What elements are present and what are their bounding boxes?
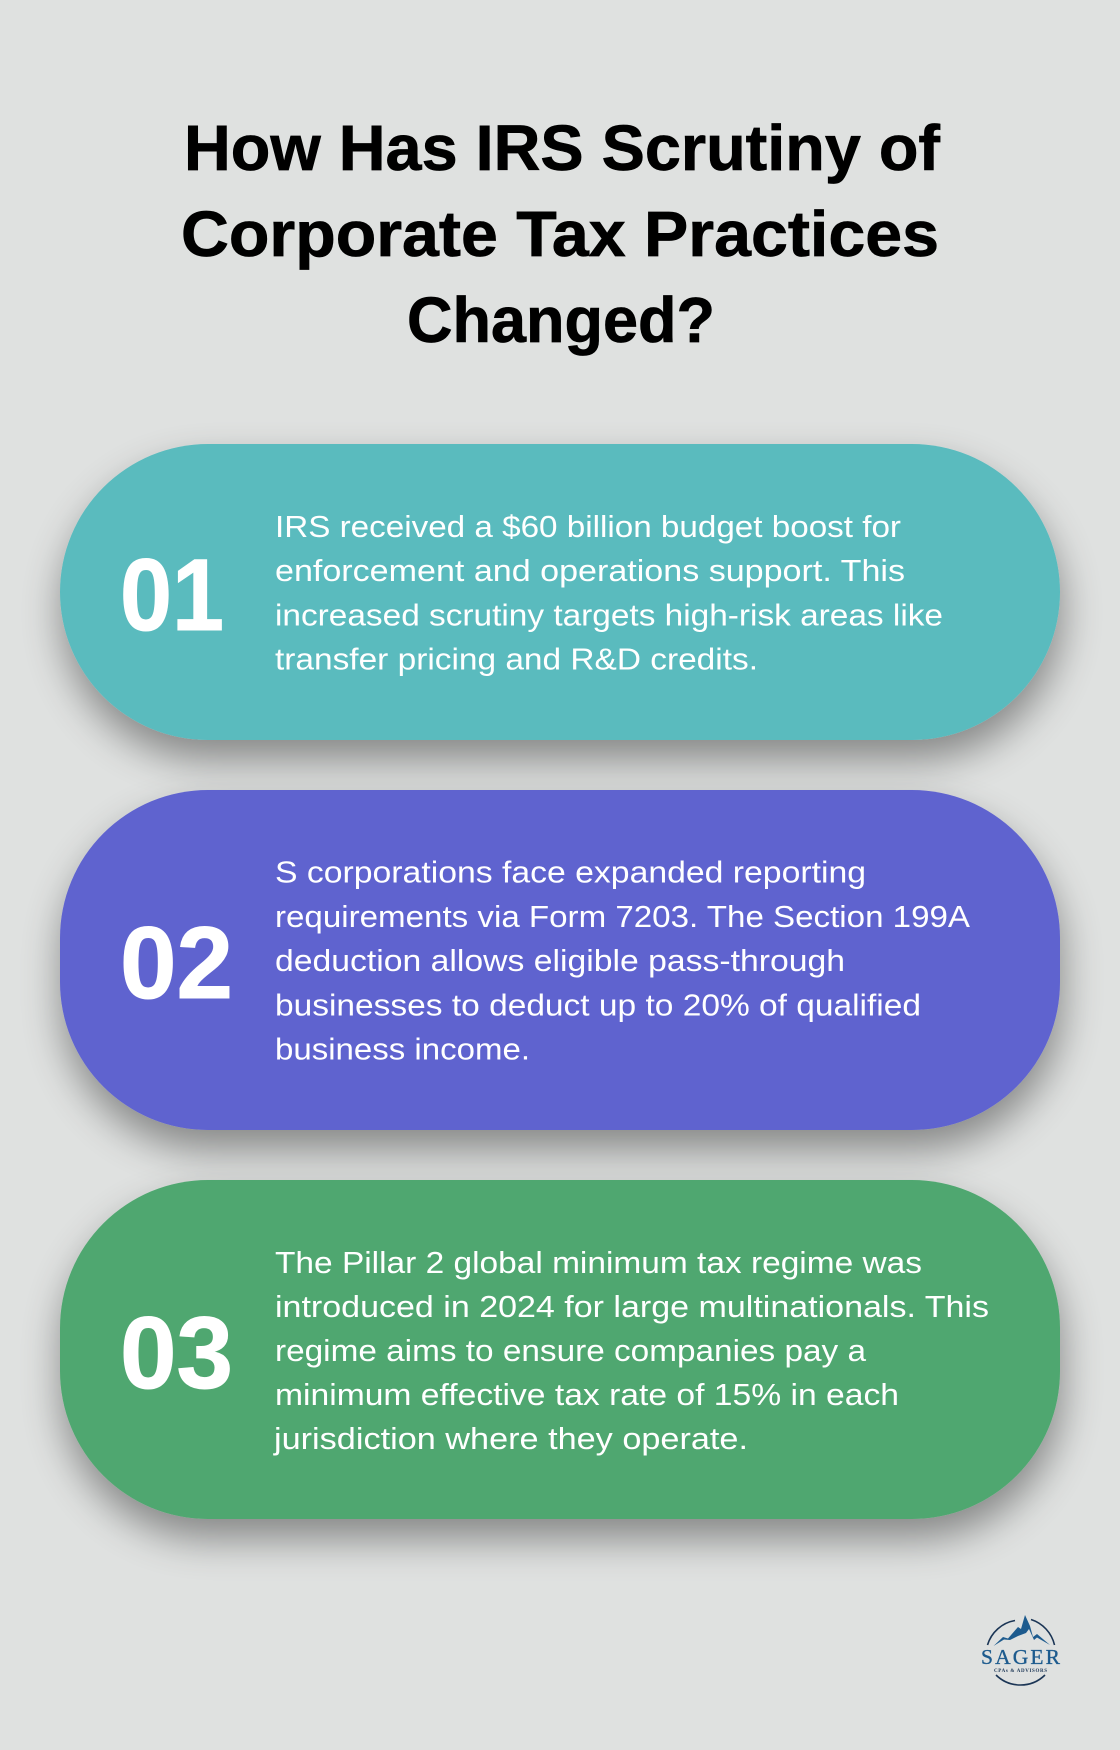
text block 03 (273, 1245, 989, 1456)
text block 03: The Pillar 2 global minimum tax regime was (275, 1245, 922, 1280)
pill background 02 (60, 790, 1060, 1130)
logo wordmark: SAGER (981, 1645, 1061, 1669)
title: Changed? (407, 284, 715, 356)
logo: Sager CPAs & Advisors (981, 1615, 1061, 1685)
panel: step 03 (60, 1180, 1060, 1519)
text block 01 (275, 509, 943, 676)
number 03: 03 (120, 1296, 233, 1410)
panel: step 01 (60, 444, 1060, 740)
number 02: 02 (120, 906, 233, 1020)
title: Corporate Tax Practices (181, 198, 939, 270)
text block 02: business income. (275, 1032, 530, 1066)
panel: step 02 (60, 790, 1060, 1130)
text block 02 (275, 854, 970, 1066)
pill background 01 (60, 444, 1060, 740)
text block 02: deduction allows eligible pass-through (275, 943, 845, 978)
text block 01: IRS received a $60 billion budget boost for (275, 509, 901, 544)
text block 01: enforcement and operations support. This (275, 553, 905, 588)
text block 03: introduced in 2024 for large multinationals. This (275, 1289, 989, 1324)
number 01: 01 (120, 538, 224, 652)
title (181, 112, 941, 356)
text block 03: minimum effective tax rate of 15% in each (275, 1377, 899, 1412)
text block 03: jurisdiction where they operate. (273, 1421, 748, 1456)
title: How Has IRS Scrutiny of (184, 112, 941, 184)
logo ring arcs (988, 1620, 1054, 1685)
text block 02: requirements via Form 7203. The Section 199A (275, 899, 970, 934)
text block 02: businesses to deduct up to 20% of qualified (275, 988, 921, 1022)
text block 03: regime aims to ensure companies pay a (275, 1333, 867, 1368)
text block 02: S corporations face expanded reporting (275, 854, 866, 890)
text block 01: transfer pricing and R&D credits. (275, 642, 758, 676)
text block 01: increased scrutiny targets high-risk areas like (275, 598, 943, 632)
logo tagline: CPAs & ADVISORS (994, 1669, 1047, 1674)
pill background 03 (60, 1180, 1060, 1519)
logo mountain (994, 1615, 1050, 1646)
